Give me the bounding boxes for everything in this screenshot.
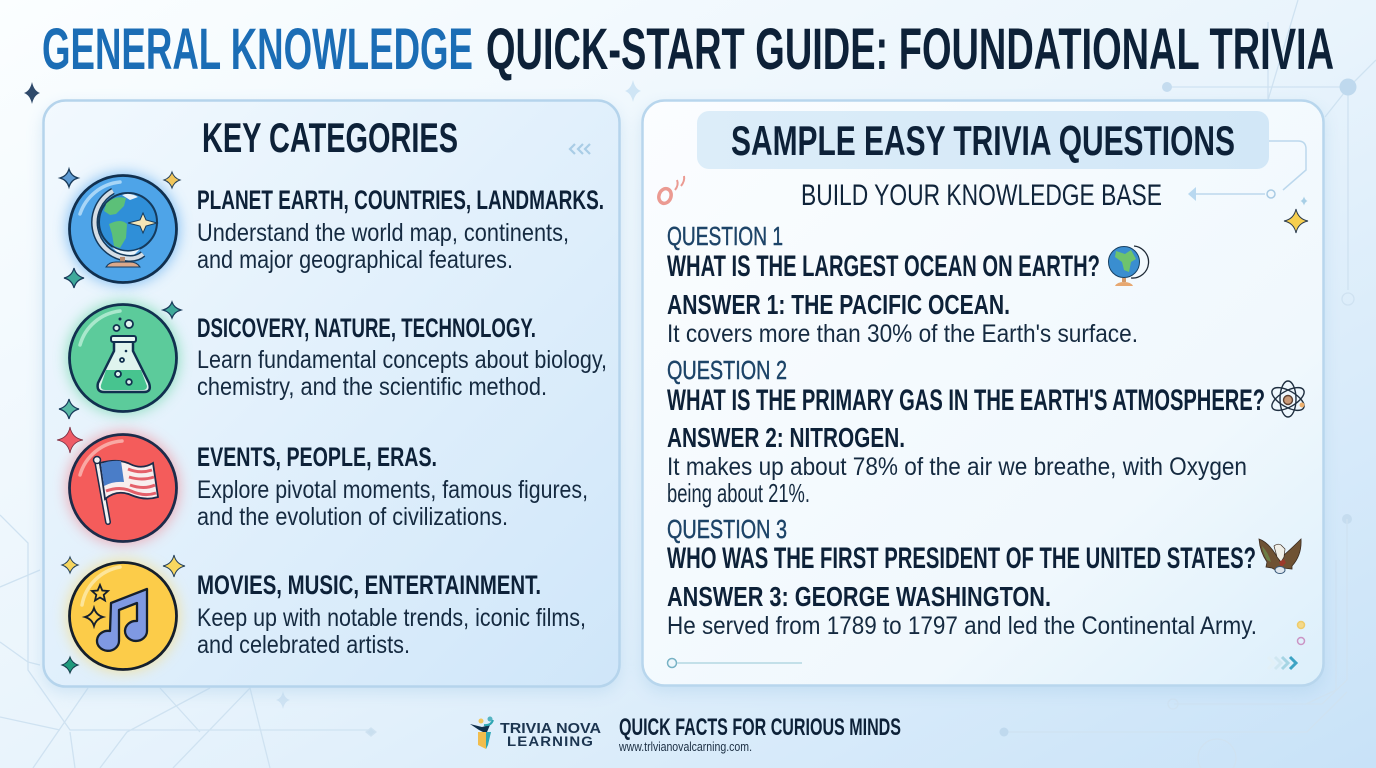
text block: planet earth: Understand the world map, continents, bbox=[197, 219, 569, 247]
text block: movies bbox=[197, 570, 586, 659]
icon: chevrons bbox=[1268, 657, 1296, 669]
icon: sparkle bbox=[64, 268, 84, 288]
question 1: ANSWER 1: THE PACIFIC OCEAN. bbox=[667, 289, 1010, 320]
panel shadows bbox=[43, 106, 1324, 692]
text block: planet earth bbox=[197, 185, 604, 274]
icon: bottom dots bbox=[1298, 622, 1304, 644]
panel: key categories bbox=[44, 100, 620, 686]
text block: planet earth: PLANET EARTH, COUNTRIES, LANDMARKS. bbox=[197, 185, 604, 215]
text block: movies: Keep up with notable trends, iconic films, bbox=[197, 604, 586, 632]
logo: LEARNING bbox=[507, 734, 594, 749]
icon: small globe bbox=[1108, 246, 1149, 286]
icon: connector node and arrow bbox=[1188, 187, 1275, 201]
decorative sparkle: top left bbox=[24, 82, 40, 104]
icon: gold sparkle bbox=[1284, 209, 1308, 233]
tagline: QUICK FACTS FOR CURIOUS MINDS bbox=[619, 714, 901, 741]
text block: discovery: Learn fundamental concepts about biology, bbox=[197, 346, 607, 374]
title: GENERAL KNOWLEDGE bbox=[42, 17, 473, 82]
text block: movies: MOVIES, MUSIC, ENTERTAINMENT. bbox=[197, 570, 541, 600]
icon: chevrons bbox=[570, 144, 590, 154]
icon: flag badge bbox=[67, 432, 179, 544]
question 1: WHAT IS THE LARGEST OCEAN ON EARTH? bbox=[667, 250, 1100, 283]
question 1 bbox=[667, 221, 1138, 348]
icon: pink signal bbox=[657, 176, 684, 205]
icon: small sparkle bbox=[1300, 196, 1308, 206]
question 1: QUESTION 1 bbox=[667, 221, 783, 251]
question 2 bbox=[667, 355, 1265, 508]
website: www.trlvianovalcarning.com. bbox=[618, 740, 752, 754]
question 2: QUESTION 2 bbox=[667, 355, 787, 385]
icon: sparkle bbox=[163, 302, 181, 318]
text block: planet earth: and major geographical features. bbox=[197, 246, 513, 274]
text block: events: EVENTS, PEOPLE, ERAS. bbox=[197, 442, 437, 472]
panel: sample questions bbox=[642, 100, 1324, 686]
decorative sparkle: between panels bbox=[625, 80, 641, 102]
icon: globe badge bbox=[67, 173, 179, 285]
icon: sparkle bbox=[62, 657, 78, 673]
icon: atom bbox=[1268, 381, 1308, 417]
title bbox=[42, 17, 1334, 82]
heading: key categories: KEY CATEGORIES bbox=[202, 114, 458, 161]
text block: events: and the evolution of civilizations. bbox=[197, 503, 508, 531]
question 3 bbox=[667, 514, 1257, 640]
question 2: ANSWER 2: NITROGEN. bbox=[667, 422, 905, 453]
question 3: QUESTION 3 bbox=[667, 514, 787, 544]
connector line bbox=[1190, 141, 1306, 194]
text block: movies: and celebrated artists. bbox=[197, 631, 410, 659]
text block: discovery: DSICOVERY, NATURE, TECHNOLOGY. bbox=[197, 313, 536, 343]
footer bbox=[470, 714, 901, 754]
decoration: progress line bbox=[668, 658, 802, 668]
question 2: It makes up about 78% of the air we breathe, with Oxygen bbox=[667, 453, 1247, 481]
icon: music badge bbox=[67, 560, 179, 672]
heading: sample questions bbox=[697, 111, 1269, 169]
logo: TRIVIA NOVA bbox=[500, 721, 602, 737]
text block: events: Explore pivotal moments, famous figures, bbox=[197, 476, 588, 504]
decorative sparkle: bottom bbox=[276, 691, 290, 709]
icon: sparkle bbox=[59, 399, 79, 419]
question 2: being about 21%. bbox=[667, 478, 810, 508]
question 1: It covers more than 30% of the Earth's surface. bbox=[667, 320, 1138, 348]
subheading: BUILD YOUR KNOWLEDGE BASE bbox=[801, 179, 1162, 212]
icon: eagle bbox=[1259, 539, 1301, 574]
icon: sparkle bbox=[163, 555, 185, 577]
icon: flask badge bbox=[67, 302, 179, 414]
question 3: ANSWER 3: GEORGE WASHINGTON. bbox=[667, 581, 1051, 612]
logo bbox=[470, 716, 602, 749]
icon: sparkle bbox=[60, 169, 78, 187]
text block: discovery: chemistry, and the scientific method. bbox=[197, 373, 547, 401]
icon: sparkle bbox=[164, 172, 180, 188]
text block: events bbox=[197, 442, 588, 531]
icon: sparkle bbox=[62, 557, 78, 573]
question 3: He served from 1789 to 1797 and led the Continental Army. bbox=[667, 612, 1257, 640]
icon: sparkle bbox=[57, 427, 83, 453]
text block: discovery bbox=[197, 313, 607, 401]
